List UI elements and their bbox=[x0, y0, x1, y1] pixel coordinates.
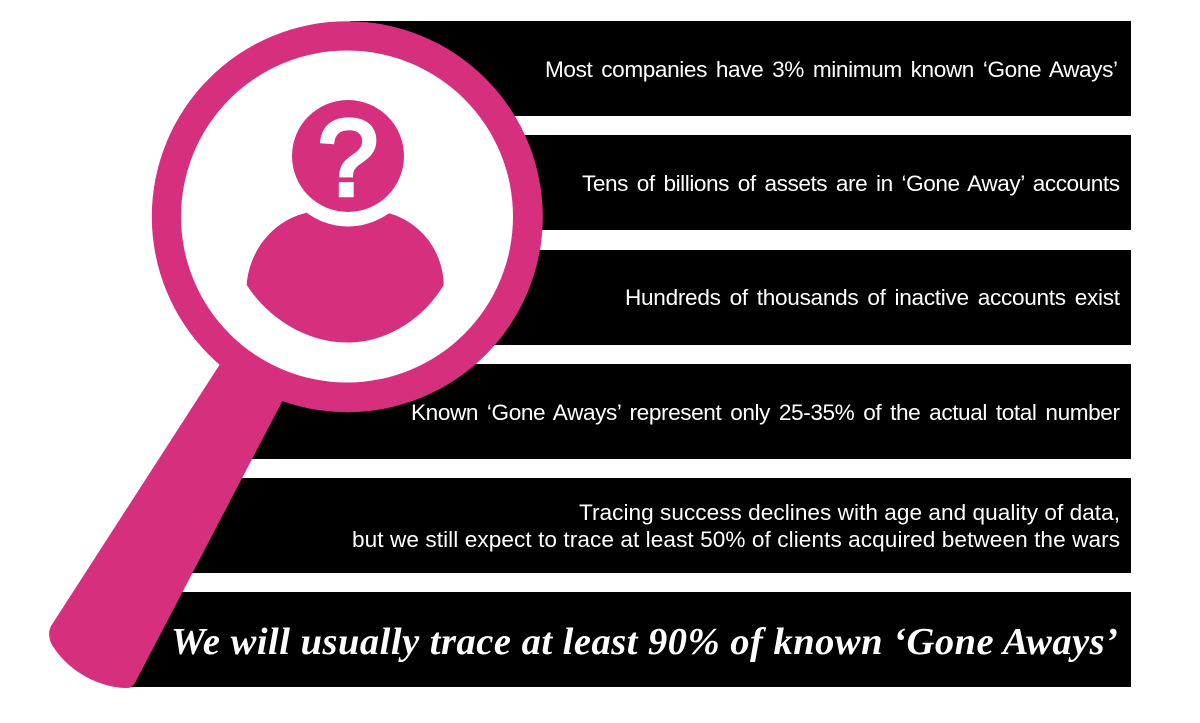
icon: person body bbox=[247, 213, 444, 342]
text: row 1: Most companies have 3% minimum known ‘Gone Aways’ bbox=[545, 57, 1118, 82]
panel: row 6 bar bbox=[125, 592, 1131, 687]
icon: magnifying glass handle bbox=[49, 361, 284, 688]
text: row 3: Hundreds of thousands of inactive accounts exist bbox=[625, 285, 1121, 310]
text: row 4: Known ‘Gone Aways’ represent only 25-35% of the actual total number bbox=[411, 400, 1120, 425]
text: row 5: but we still expect to trace at least 50% of clients acquired between the wars bbox=[352, 527, 1120, 552]
panel: row 1 bar bbox=[350, 21, 1131, 116]
text: row 6 conclusion: We will usually trace at least 90% of known ‘Gone Aways’ bbox=[171, 621, 1118, 663]
text: row 2: Tens of billions of assets are in ‘Gone Away’ accounts bbox=[582, 171, 1120, 196]
panel: row 2 bar bbox=[350, 135, 1131, 230]
text: row 5 bbox=[352, 500, 1120, 552]
panel: row 5 bar bbox=[180, 478, 1131, 573]
icon: person head bbox=[292, 100, 404, 212]
text: row 5: Tracing success declines with age and quality of data, bbox=[579, 500, 1120, 525]
panel: row 3 bar bbox=[350, 250, 1131, 345]
icon: magnifying glass lens bbox=[152, 21, 543, 412]
icon: question mark: ? bbox=[318, 97, 378, 218]
panel: row 4 bar bbox=[230, 364, 1131, 459]
icon: person with question mark head bbox=[247, 97, 444, 342]
